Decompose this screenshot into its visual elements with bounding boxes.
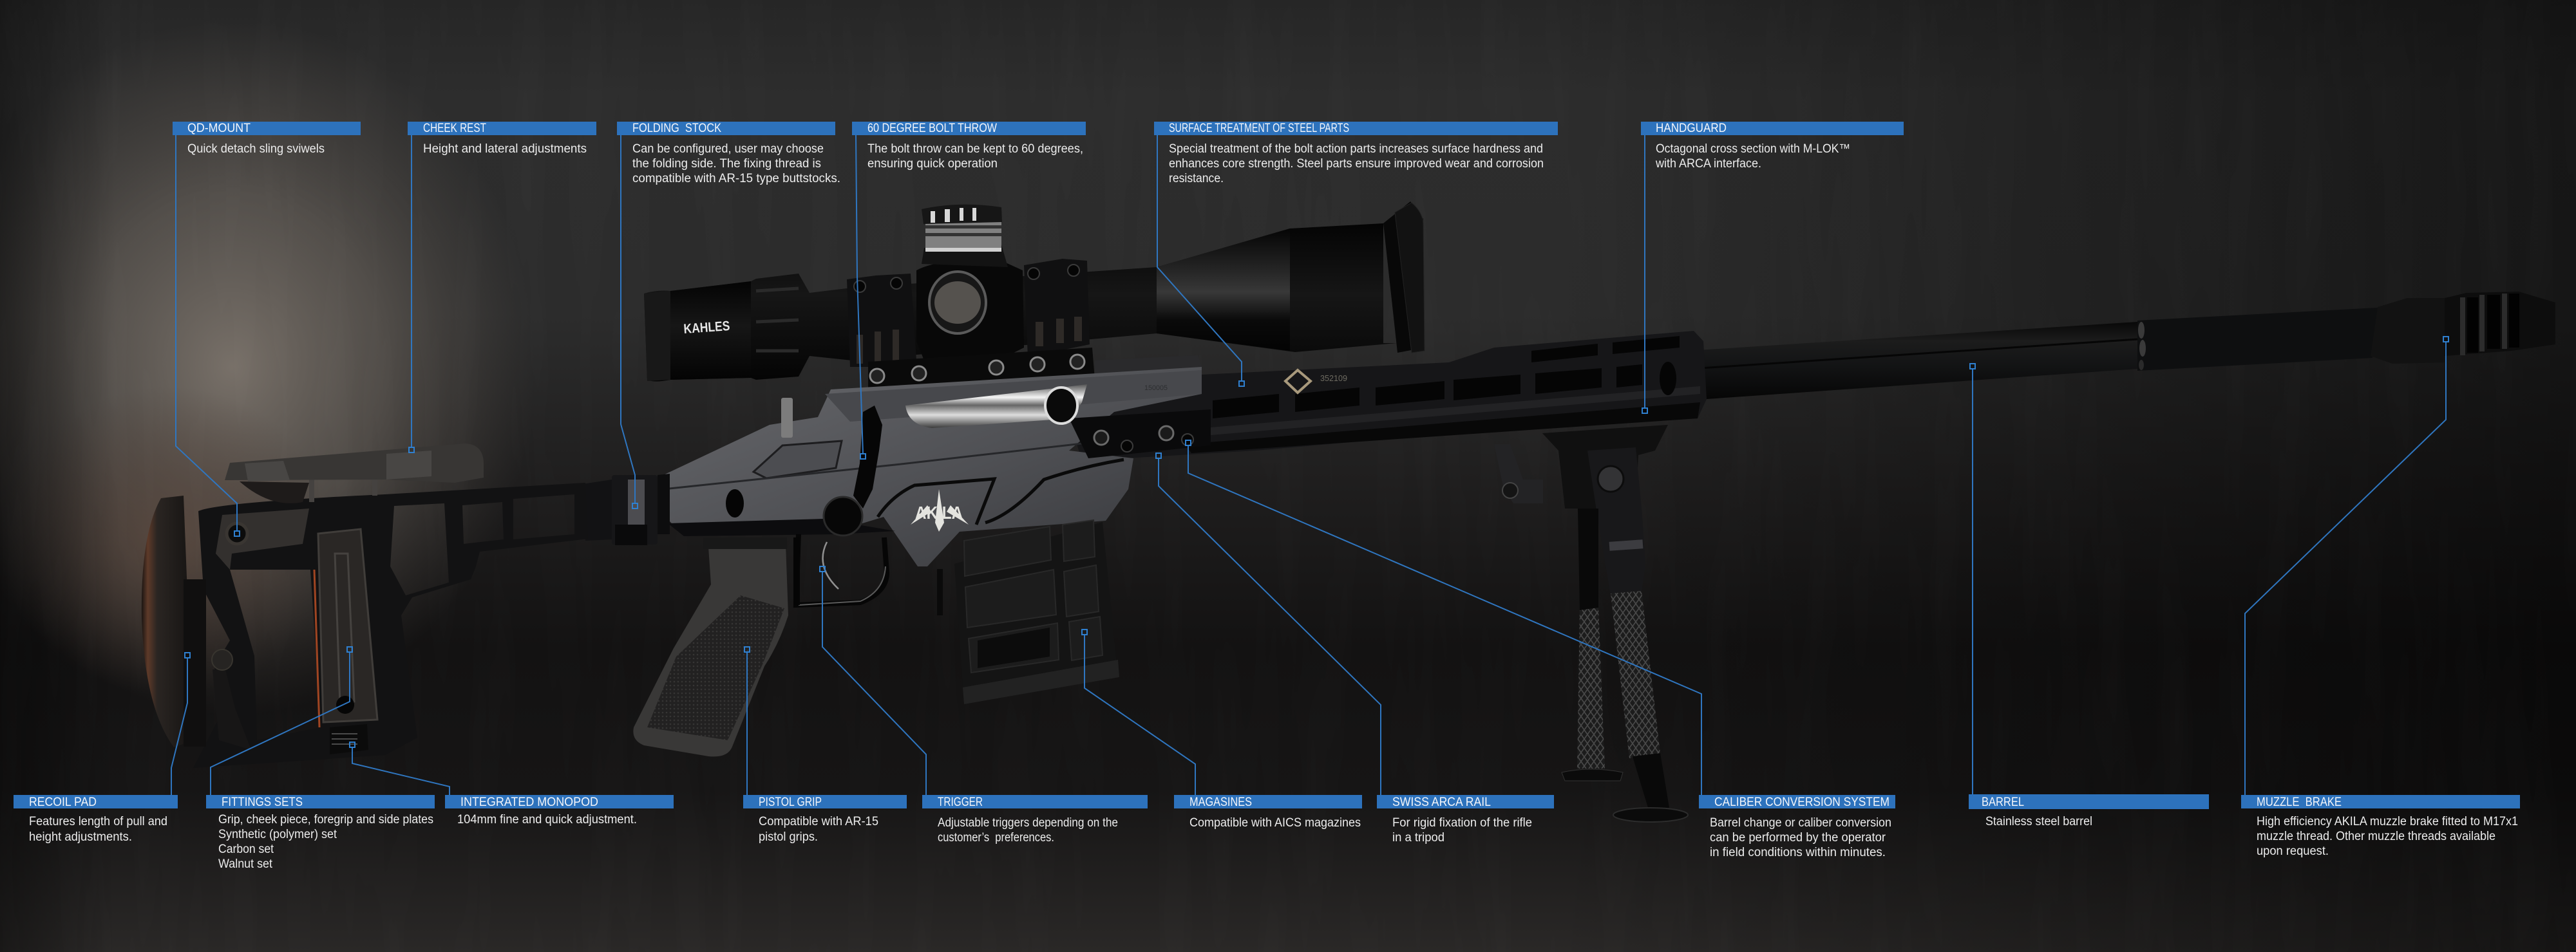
- leader line: [211, 647, 352, 795]
- label bar: CALIBER CONVERSION SYSTEM: [1714, 796, 1889, 809]
- description: [1169, 142, 1544, 185]
- bolt: [781, 384, 1087, 536]
- brand KAHLES: KAHLES: [683, 319, 730, 337]
- leader line: [409, 135, 414, 453]
- description: in field conditions within minutes.: [1710, 846, 1886, 859]
- description: Synthetic (polymer) set: [218, 828, 337, 841]
- logo: AKILA: [911, 489, 969, 532]
- leader line: [744, 647, 750, 795]
- leader line: [350, 742, 450, 795]
- description: Features length of pull and: [29, 815, 167, 828]
- label bar: FITTINGS SETS: [222, 796, 303, 809]
- receiver markings: 150005: [1144, 384, 1168, 392]
- description: can be performed by the operator: [1710, 831, 1886, 845]
- description: [632, 142, 840, 185]
- callout: FITTINGS SETS: [206, 647, 435, 871]
- description: ensuring quick operation: [867, 157, 998, 171]
- description: [29, 815, 167, 844]
- label bar: BARREL: [1982, 796, 2024, 809]
- callout: SURFACE TREATMENT OF STEEL PARTS: [1154, 122, 1558, 386]
- callout: HANDGUARD: [1641, 122, 1904, 413]
- scope rail and base: [868, 348, 1202, 394]
- description: Stainless steel barrel: [1985, 815, 2092, 828]
- leader line: [176, 135, 240, 536]
- description: Octagonal cross section with M-LOK™: [1656, 142, 1850, 156]
- label bar: [206, 795, 435, 809]
- label bar: [617, 122, 835, 135]
- label bar: [408, 122, 596, 135]
- label bar: 60 DEGREE BOLT THROW: [867, 122, 997, 135]
- description: Compatible with AR-15: [759, 815, 878, 828]
- description: in a tripod: [1392, 831, 1444, 845]
- description: [218, 813, 433, 871]
- callout: MUZZLE BRAKE: [2241, 337, 2520, 858]
- description: High efficiency AKILA muzzle brake fitted to M17x1: [2257, 815, 2518, 828]
- description: muzzle thread. Other muzzle threads available: [2257, 830, 2496, 843]
- description: [867, 142, 1083, 171]
- label bar: [1641, 122, 1904, 135]
- leader line: [856, 135, 866, 459]
- label bar: INTEGRATED MONOPOD: [460, 796, 598, 809]
- description: [2257, 815, 2518, 858]
- label bar: [1174, 795, 1362, 809]
- description: Barrel change or caliber conversion: [1710, 816, 1891, 830]
- leader line: [1157, 135, 1244, 386]
- bipod: [1494, 425, 1688, 822]
- description: [1392, 816, 1532, 845]
- label bar: SURFACE TREATMENT OF STEEL PARTS: [1169, 122, 1349, 135]
- recoil pad: [142, 496, 251, 750]
- callout: BARREL: [1969, 364, 2209, 828]
- folding hinge: [583, 474, 670, 545]
- callout: CALIBER CONVERSION SYSTEM: [1186, 440, 1895, 859]
- leader line: [1082, 630, 1195, 795]
- muzzle brake: [2371, 292, 2555, 364]
- description: resistance.: [1169, 172, 1224, 185]
- description: pistol grips.: [759, 830, 818, 844]
- callout: MAGASINES: [1082, 630, 1362, 830]
- label bar: [743, 795, 907, 809]
- callout: 60 DEGREE BOLT THROW: [852, 122, 1086, 459]
- callout: CHEEK REST: [408, 122, 596, 453]
- trigger guard: [793, 534, 887, 605]
- description: Walnut set: [218, 857, 273, 871]
- description: 104mm fine and quick adjustment.: [457, 813, 637, 826]
- description: enhances core strength. Steel parts ensure improved wear and corrosion: [1169, 157, 1544, 171]
- description: Grip, cheek piece, foregrip and side plates: [218, 813, 433, 826]
- receiver markings: 352109: [1320, 373, 1347, 383]
- leader line: [171, 653, 190, 795]
- description: [1710, 816, 1891, 859]
- description: Adjustable triggers depending on the: [938, 816, 1118, 830]
- label bar: QD-MOUNT: [187, 122, 251, 135]
- leader line: [1186, 440, 1701, 795]
- label bar: RECOIL PAD: [29, 796, 97, 809]
- description: [759, 815, 878, 844]
- leader line: [1156, 453, 1381, 795]
- magazine: [937, 520, 1119, 704]
- description: [938, 816, 1118, 845]
- label bar: [2241, 795, 2520, 809]
- description: Can be configured, user may choose: [632, 142, 824, 156]
- label bar: [14, 795, 178, 809]
- logo: AKILA: AKILA: [915, 503, 963, 523]
- leader line: [621, 135, 638, 509]
- callout: INTEGRATED MONOPOD: [350, 742, 674, 826]
- description: height adjustments.: [29, 830, 132, 844]
- handguard: [1069, 331, 1707, 461]
- description: the folding side. The fixing thread is: [632, 157, 821, 171]
- label bar: CHEEK REST: [423, 122, 486, 135]
- label bar: [922, 795, 1148, 809]
- description: compatible with AR-15 type buttstocks.: [632, 172, 840, 185]
- description: upon request.: [2257, 845, 2329, 858]
- label bar: PISTOL GRIP: [759, 796, 822, 809]
- leader line: [2245, 337, 2448, 795]
- callout: TRIGGER: [820, 566, 1148, 845]
- callout: FOLDING STOCK: [617, 122, 840, 509]
- cheek rest: [225, 443, 484, 503]
- description: The bolt throw can be kept to 60 degrees,: [867, 142, 1083, 156]
- label bar: TRIGGER: [938, 796, 983, 809]
- leader line: [1970, 364, 1975, 794]
- rifle photograph redrawn: [142, 201, 2555, 822]
- description: Carbon set: [218, 843, 274, 856]
- scope: [644, 201, 1425, 381]
- description: Height and lateral adjustments: [423, 142, 587, 156]
- callout: RECOIL PAD: [14, 653, 190, 844]
- label bar: SWISS ARCA RAIL: [1392, 796, 1491, 809]
- description: [1655, 142, 1850, 171]
- label bar: [1154, 122, 1558, 135]
- label bar: MAGASINES: [1189, 796, 1252, 809]
- description: For rigid fixation of the rifle: [1392, 816, 1532, 830]
- callout: QD-MOUNT: [173, 122, 361, 536]
- turret: [916, 205, 1024, 360]
- description: Special treatment of the bolt action parts increases surface hardness and: [1169, 142, 1543, 156]
- description: customer’s preferences.: [938, 831, 1054, 845]
- description: Compatible with AICS magazines: [1189, 816, 1361, 830]
- label bar: HANDGUARD: [1656, 122, 1727, 135]
- label bar: FOLDING STOCK: [632, 122, 721, 135]
- callout: SWISS ARCA RAIL: [1156, 453, 1554, 845]
- label bar: [445, 795, 674, 809]
- leader line: [1642, 135, 1647, 413]
- label bar: [173, 122, 361, 135]
- leader line: [820, 566, 926, 795]
- label bar: [852, 122, 1086, 135]
- stock: [193, 483, 588, 768]
- description: Quick detach sling sviwels: [187, 142, 325, 156]
- label bar: MUZZLE BRAKE: [2257, 796, 2342, 809]
- label bar: [1377, 795, 1554, 809]
- pistol grip: [633, 537, 788, 756]
- receiver markings: [1144, 370, 1347, 393]
- chassis: [663, 367, 1211, 566]
- label bar: [1969, 794, 2209, 809]
- callout: PISTOL GRIP: [743, 647, 907, 844]
- description: with ARCA interface.: [1655, 157, 1761, 171]
- barrel: [1687, 308, 2378, 399]
